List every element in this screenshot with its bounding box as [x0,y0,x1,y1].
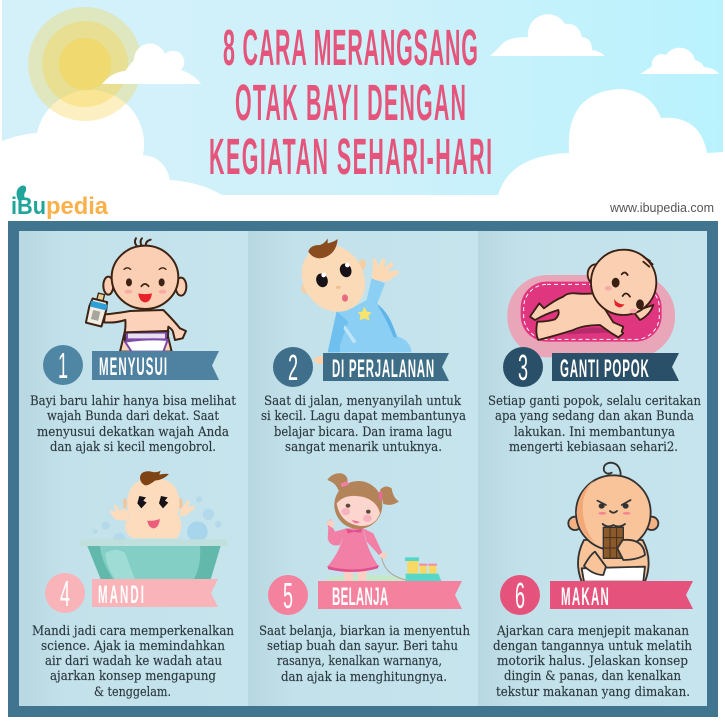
banner: belanja: BELANJA [332,583,388,611]
banner: di perjalanan: DI PERJALANAN [332,355,434,383]
description 2: Saat di jalan, menyanyilah untuk [264,394,461,409]
description 4: & tenggelam. [94,685,171,700]
description 5: setiap buah dan sayur. Beri tahu [267,639,458,654]
description 1: Bayi baru lahir hanya bisa melihat [30,394,237,409]
banner: mandi: MANDI [98,581,144,609]
header sky [0,0,723,195]
description 3: mengerti kebiasaan sehari2. [509,440,678,455]
number badge 3 [503,347,543,389]
outer frame [8,221,718,717]
banner: belanja [318,581,462,611]
description 6: dengan tangannya untuk melatih [493,639,693,654]
icon: sun [28,7,142,121]
description 2: sangat menarik untuknya. [285,440,442,455]
number badge 4: 4 [60,574,70,615]
description 3: Setiap ganti popok, selalu ceritakan [488,394,702,409]
description 3: apa yang sedang dan akan Bunda [495,409,694,424]
website url: www.ibupedia.com [609,201,714,215]
title: OTAK BAYI DENGAN [235,76,466,132]
number badge 2 [273,347,313,389]
banner: makan [550,581,693,611]
title [209,21,492,186]
illustration: baby in bath tub [80,471,227,582]
number badge 2: 2 [288,348,298,389]
number badge 1 [43,345,83,387]
description 1: menyusui dekatkan wajah Anda [37,425,229,440]
description 4: ajarkan konsep mengapung [50,669,216,684]
description 5: dan ajak ia menghitungnya. [281,670,447,685]
banner: ganti popok [552,353,679,383]
panel: 3 ganti popok [488,250,702,455]
illustration: baby with bottle [85,238,186,352]
big clouds [0,89,723,195]
banner: menyusui [92,351,219,381]
description 5: Saat belanja, biarkan ia menyentuh [259,624,471,639]
description 1: dan ajak si kecil mengobrol. [50,440,216,455]
panel: 1 menyusui [30,238,237,455]
number badge 6 [500,575,540,617]
description 2: belajar bicara. Dan irama lagu [274,425,452,440]
banner: makan: MAKAN [561,583,609,611]
number badge 4 [45,573,85,615]
description 6: motorik halus. Jelaskan konsep [497,654,688,669]
number badge 5: 5 [283,576,293,617]
number badge 6: 6 [515,576,525,617]
title: 8 CARA MERANGSANG [223,21,478,77]
illustration: baby eating chocolate [568,463,658,582]
description 6: dingin & panas, dan kenalkan [504,669,682,684]
description 5: rasanya, kenalkan warnanya, [277,654,442,669]
description 1: wajah Bunda dari dekat. Saat [47,409,220,424]
illustration: baby on changing mat [507,250,675,357]
panel: 5 belanja [259,473,471,685]
description 1 [30,394,237,455]
description 4: Mandi jadi cara memperkenalkan [32,624,235,639]
description 4: air dari wadah ke wadah atau [45,654,222,669]
description 2: si kecil. Lagu dapat membantunya [261,409,466,424]
description 4: science. Ajak ia memindahkan [41,639,226,654]
description 5 [259,624,471,685]
description 2 [261,394,466,455]
logo: ibupedia: pedia [46,193,109,220]
illustration: crawling baby [289,232,412,364]
logo: ibupedia: iBu [11,193,46,220]
description 3 [488,394,702,455]
description 6: tekstur makanan yang dimakan. [496,685,690,700]
title: KEGIATAN SEHARI-HARI [209,130,492,186]
description 6: Ajarkan cara menjepit makanan [496,624,690,639]
panel: 2 di perjalanan [261,232,466,455]
illustration: girl with toy train [325,473,442,587]
banner: mandi [92,579,218,609]
panel: 6 makan [493,463,693,700]
number badge 1: 1 [58,346,68,387]
small clouds [102,14,719,84]
description 3: lakukan. Ini membantunya [514,425,675,440]
number badge 3: 3 [518,348,528,389]
banner: ganti popok: GANTI POPOK [560,355,649,383]
panel: 4 mandi [32,471,235,700]
description 6 [493,624,693,700]
description 4 [32,624,235,700]
logo: ibupedia [11,186,109,220]
banner: menyusui: MENYUSUI [99,353,167,381]
number badge 5 [268,575,308,617]
